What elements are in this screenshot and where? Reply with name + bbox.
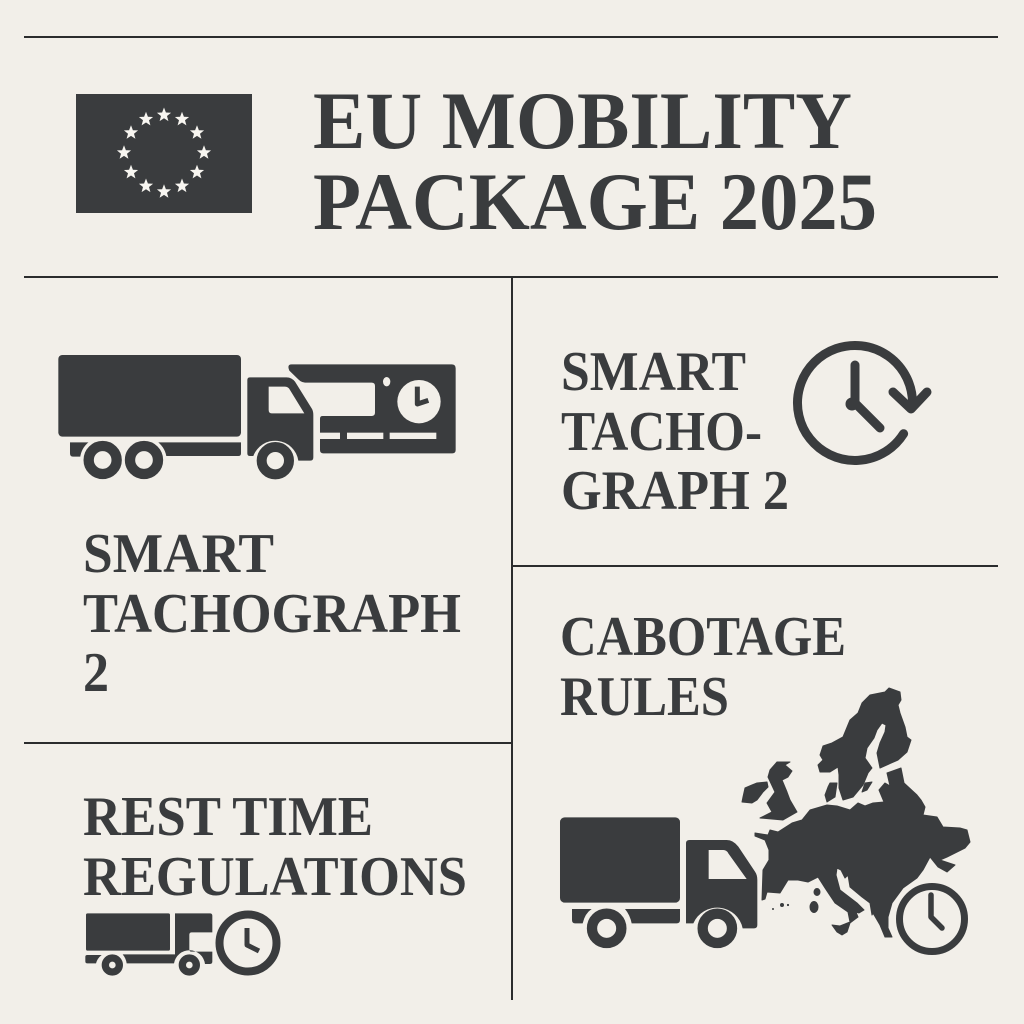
heading: cabotage rules: RULES xyxy=(560,666,729,728)
icon: clock xyxy=(892,879,972,959)
heading: rest time regulations: REST TIME xyxy=(83,786,373,848)
icon: truck xyxy=(560,817,757,943)
panel: rest time regulations xyxy=(83,786,467,972)
icon: truck with tachograph unit xyxy=(58,355,456,483)
heading: rest time regulations xyxy=(83,786,467,908)
heading: cabotage rules xyxy=(560,606,846,728)
heading: cabotage rules: CABOTAGE xyxy=(560,606,846,668)
icon: clock with circular arrow xyxy=(798,345,927,460)
heading: smart tachograph 2: TACHOGRAPH xyxy=(83,583,461,645)
heading: smart tacho-graph 2: TACHO- xyxy=(561,401,762,463)
panel: smart tachograph 2 (right) xyxy=(561,341,927,522)
icon: EU flag xyxy=(76,94,252,213)
heading: smart tacho-graph 2 xyxy=(561,341,789,522)
heading: rest time regulations: REGULATIONS xyxy=(83,846,467,908)
heading: smart tacho-graph 2: GRAPH 2 xyxy=(561,460,789,522)
title xyxy=(313,75,877,247)
heading: smart tachograph 2 xyxy=(83,523,461,704)
heading: smart tachograph 2: 2 xyxy=(83,642,109,704)
icon: clock xyxy=(220,914,276,972)
panel: smart tachograph 2 (left) xyxy=(58,355,461,704)
icon: small truck xyxy=(85,913,212,972)
title: EU MOBILITY xyxy=(313,75,852,166)
heading: smart tacho-graph 2: SMART xyxy=(561,341,746,403)
icon: map of Europe xyxy=(742,688,970,937)
title: PACKAGE 2025 xyxy=(313,156,877,247)
heading: smart tachograph 2: SMART xyxy=(83,523,274,585)
panel: header xyxy=(76,75,877,247)
panel: cabotage rules xyxy=(560,606,972,959)
